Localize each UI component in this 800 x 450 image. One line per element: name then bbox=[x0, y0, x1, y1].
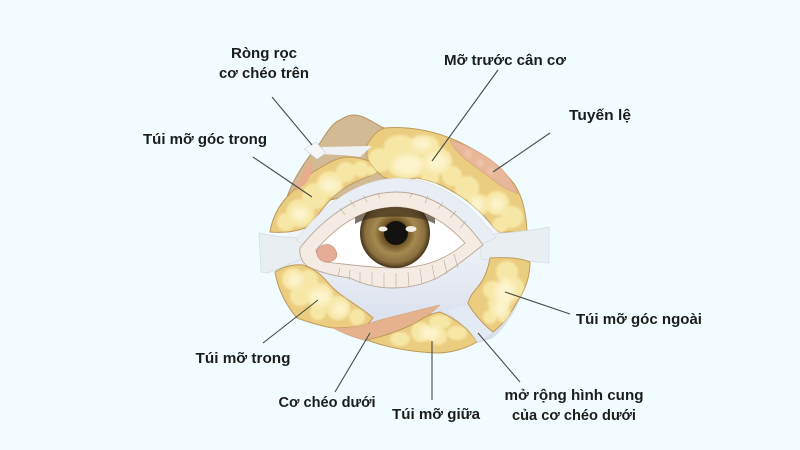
caruncle bbox=[317, 244, 337, 262]
leader lines bbox=[253, 70, 570, 400]
label: Túi mỡ trong: Túi mỡ trong bbox=[196, 351, 290, 367]
eye anatomy illustration bbox=[259, 115, 549, 353]
lower medial fat pad bbox=[275, 265, 373, 328]
eyelid ring bbox=[300, 192, 483, 288]
iris and pupil bbox=[355, 207, 435, 268]
label: Ròng rọc cơ chéo trên: cơ chéo trên bbox=[219, 66, 309, 82]
label: mở rộng hình cung của cơ chéo dưới bbox=[504, 388, 644, 424]
upper medial fat pad bbox=[270, 157, 379, 232]
label: mở rộng hình cung của cơ chéo dưới: mở rộng hình cung bbox=[504, 388, 644, 404]
label: Túi mỡ góc trong: Túi mỡ góc trong bbox=[143, 132, 267, 148]
label: Túi mỡ góc ngoài: Túi mỡ góc ngoài bbox=[576, 312, 702, 328]
eyelashes bbox=[338, 193, 466, 288]
septum behind eye bbox=[272, 226, 530, 347]
label: mở rộng hình cung của cơ chéo dưới: của cơ chéo dưới bbox=[512, 408, 636, 424]
label: Tuyến lệ: Tuyến lệ bbox=[569, 108, 631, 124]
label: Mỡ trước cân cơ: Mỡ trước cân cơ bbox=[444, 53, 567, 69]
upper septum arc bbox=[296, 178, 496, 246]
label: Ròng rọc cơ chéo trên bbox=[219, 46, 309, 82]
arcuate expansion bbox=[447, 305, 493, 342]
medial canthal band bbox=[259, 233, 305, 273]
medial pink muscle sliver bbox=[295, 158, 312, 192]
upper central pre-aponeurotic fat pad bbox=[367, 127, 527, 233]
label: Ròng rọc cơ chéo trên: Ròng rọc bbox=[231, 46, 297, 62]
inferior oblique muscle bbox=[333, 305, 440, 341]
central lower fat pad bbox=[367, 312, 477, 353]
lateral lower fat pad bbox=[468, 258, 530, 332]
eyeball white bbox=[316, 207, 465, 268]
label: Túi mỡ giữa: Túi mỡ giữa bbox=[392, 407, 481, 423]
trochlea and superior oblique tendon bbox=[304, 142, 372, 159]
lacrimal gland bbox=[450, 140, 518, 194]
lateral canthal band bbox=[478, 227, 549, 263]
tan orbital rim tissue bbox=[270, 115, 400, 232]
label: Cơ chéo dưới: Cơ chéo dưới bbox=[278, 395, 376, 411]
